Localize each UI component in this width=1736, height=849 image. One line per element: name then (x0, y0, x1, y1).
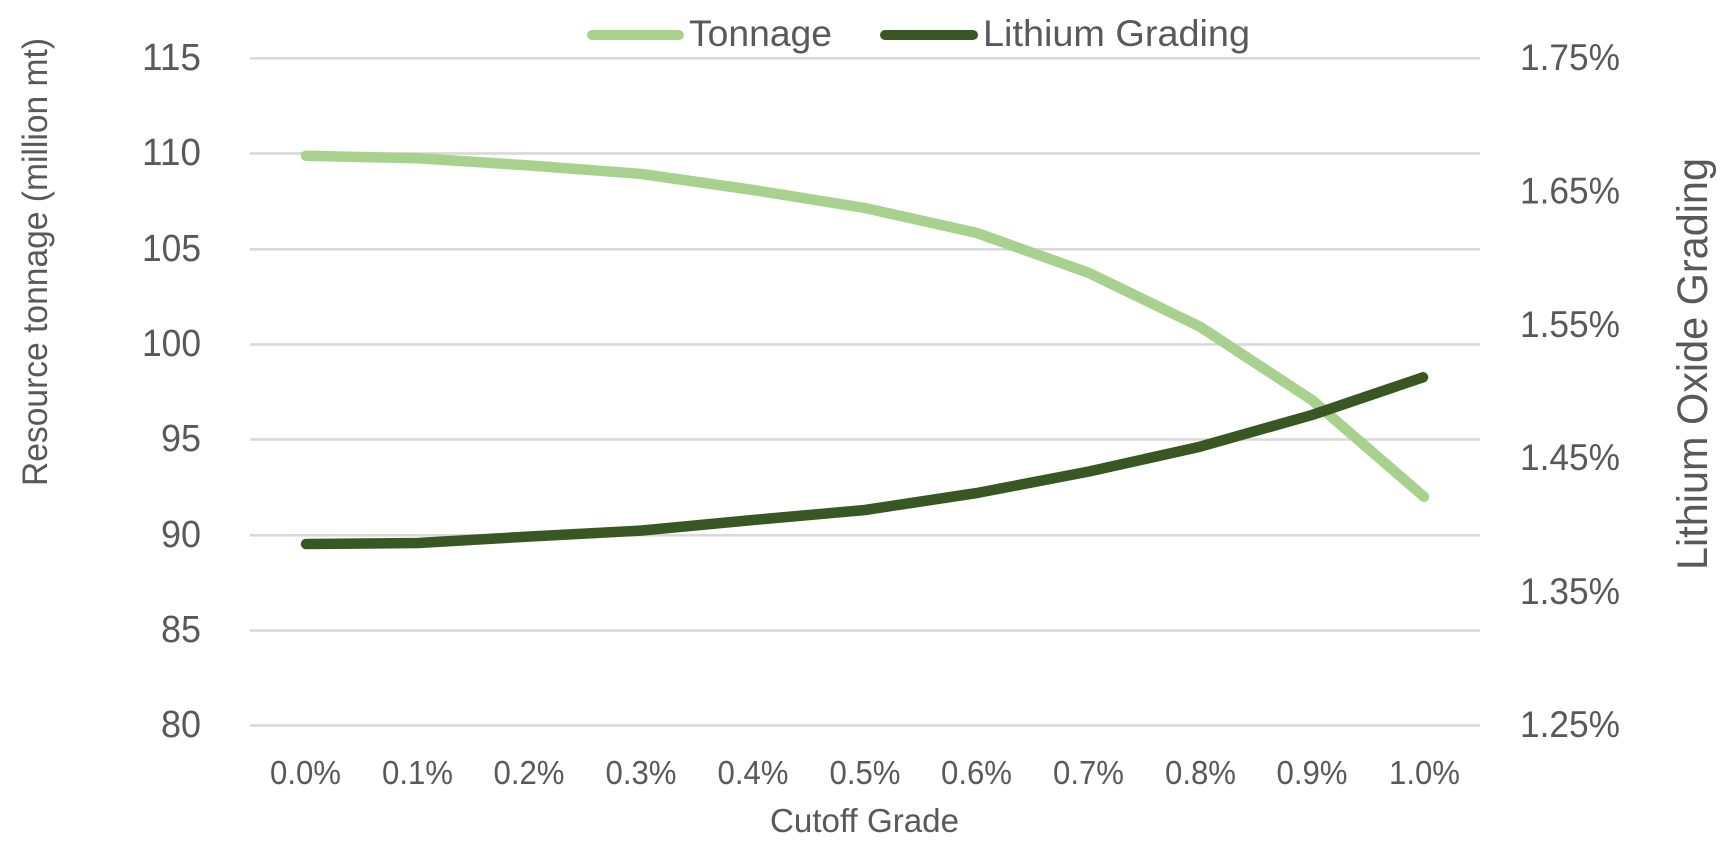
legend label: tonnage: Tonnage (689, 13, 832, 54)
left axis tick labels: 100 (142, 323, 201, 365)
x axis tick labels: 0.9% (1276, 754, 1348, 791)
right axis tick labels: 1.65% (1520, 170, 1620, 212)
x axis tick labels (270, 754, 1460, 791)
right axis tick labels (1520, 37, 1620, 745)
x axis tick labels: 0.8% (1165, 754, 1236, 791)
x axis tick labels: 0.5% (830, 754, 900, 791)
legend label: lithium grading: Lithium Grading (983, 13, 1250, 54)
line series: lithium grading (306, 377, 1423, 544)
right axis tick labels: 1.45% (1520, 437, 1620, 478)
left axis tick labels (142, 37, 201, 746)
right axis tick labels: 1.25% (1520, 704, 1620, 745)
left axis tick labels: 115 (142, 37, 201, 79)
left axis tick labels: 95 (161, 418, 201, 460)
x axis tick labels: 1.0% (1389, 754, 1460, 791)
left axis tick labels: 85 (161, 609, 201, 651)
left axis title: Resource tonnage (million mt) (15, 38, 55, 486)
right axis tick labels: 1.75% (1520, 37, 1620, 78)
x axis tick labels: 0.3% (606, 754, 676, 791)
legend swatch: lithium grading (885, 30, 973, 40)
left axis tick labels: 110 (142, 132, 201, 174)
right axis tick labels: 1.55% (1520, 304, 1620, 345)
x axis tick labels: 0.1% (382, 754, 453, 791)
x axis tick labels: 0.4% (718, 754, 788, 791)
legend swatch: tonnage (592, 30, 679, 40)
line series: tonnage (306, 156, 1424, 497)
legend (592, 13, 1250, 54)
x axis tick labels: 0.2% (494, 754, 564, 791)
left axis tick labels: 80 (161, 704, 201, 746)
x axis tick labels: 0.0% (270, 754, 341, 791)
right axis tick labels: 1.35% (1520, 571, 1620, 612)
left axis tick labels: 90 (161, 514, 201, 556)
right axis title: Lithium Oxide Grading (1669, 158, 1717, 570)
x axis tick labels: 0.7% (1053, 754, 1124, 791)
left axis tick labels: 105 (142, 228, 201, 270)
x axis title: Cutoff Grade (770, 802, 959, 839)
x axis tick labels: 0.6% (941, 754, 1012, 791)
